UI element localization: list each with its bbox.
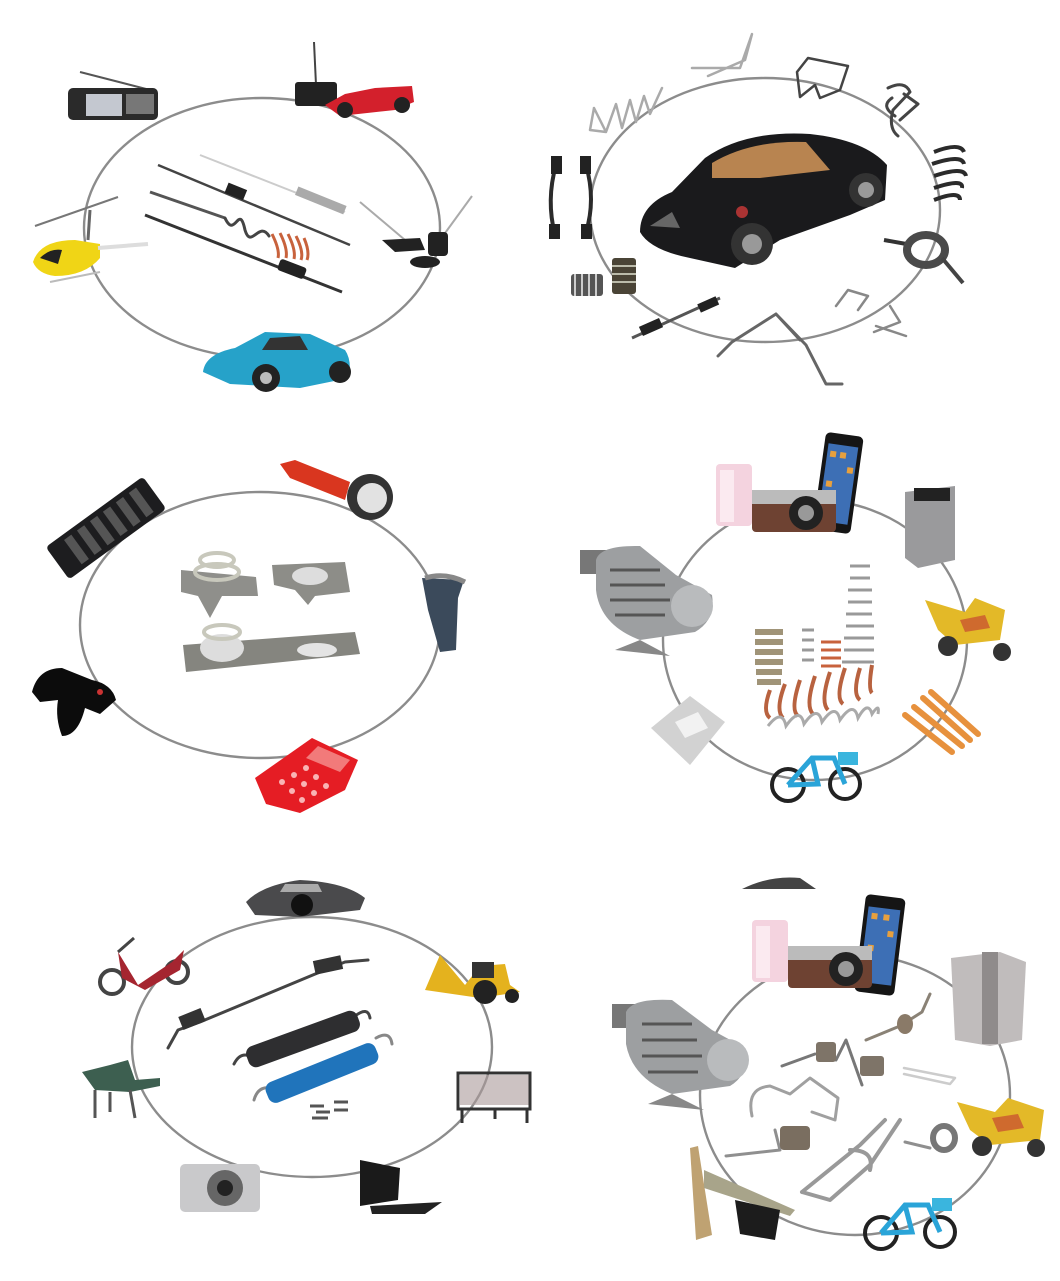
- icon: shock spring: [632, 296, 720, 338]
- spring group: wire springs: [145, 155, 350, 292]
- icon: flat wire spring: [590, 88, 662, 132]
- icon: metal hinge: [951, 952, 1026, 1046]
- icon: backhoe loader: [425, 955, 520, 1004]
- icon: power bank: [716, 464, 752, 526]
- icon: computer monitor: [360, 1160, 442, 1214]
- icon: car roof partial: [742, 877, 816, 889]
- panel: automotive springs: [549, 34, 966, 384]
- icon: red electric bike: [100, 938, 188, 994]
- icon: wire form: [797, 58, 848, 98]
- icon: red telephone: [255, 738, 358, 813]
- panel: compression springs: [580, 432, 1011, 801]
- icon: metal plate part: [651, 696, 725, 765]
- icon: smartphone: [854, 894, 906, 996]
- ring 6: [700, 955, 1010, 1235]
- icon: remote control race car: [295, 42, 414, 118]
- icon: game controller: [32, 668, 116, 736]
- icon: orange springs: [905, 692, 978, 752]
- icon: toy motorbike: [957, 1098, 1045, 1157]
- icon: trampoline: [458, 1073, 530, 1123]
- icon: blower motor: [612, 1000, 749, 1110]
- icon: red flashlight: [280, 460, 393, 520]
- ring 2: [590, 78, 940, 342]
- icon: camera: [752, 490, 836, 532]
- icon: wire clips: [836, 290, 906, 336]
- icon: blower motor: [580, 546, 713, 656]
- icon: electric shaver: [422, 576, 465, 652]
- icon: smartphone: [813, 432, 864, 534]
- spring group: compression springs: [755, 566, 878, 726]
- icon: valve springs: [571, 258, 636, 296]
- icon: torsion spring: [884, 235, 963, 283]
- icon: door handle spring: [549, 156, 592, 239]
- icon: radio: [68, 72, 158, 120]
- icon: helicopter: [33, 197, 148, 282]
- spring group: torsion springs: [726, 994, 955, 1200]
- icon: digital camera: [180, 1164, 260, 1212]
- icon: washing machine: [905, 486, 955, 568]
- ring 3: [80, 492, 440, 758]
- icon: blue child bicycle: [865, 1198, 955, 1249]
- icon: power bank: [752, 920, 788, 982]
- panel: extension springs: [82, 880, 530, 1214]
- panel: electronics and toy springs: [33, 42, 472, 392]
- icon: silver sports car: [246, 880, 365, 917]
- ring 1: [84, 98, 440, 358]
- icon: clip spring: [887, 85, 918, 136]
- panel: torsion springs: [612, 877, 1045, 1249]
- panel: battery contact springs: [32, 460, 465, 813]
- spring group: battery contacts: [181, 553, 360, 672]
- ring 4: [663, 500, 967, 780]
- icon: blue child bicycle: [772, 752, 860, 801]
- icon: blue convertible car: [203, 332, 351, 392]
- icon: toy motorbike: [925, 598, 1011, 661]
- icon: bent wire top: [692, 34, 752, 76]
- icon: long bent wire: [718, 314, 842, 384]
- icon: camera: [788, 946, 872, 988]
- icon: black car with tan interior: [640, 134, 887, 268]
- icon: wooden peg and binder clip: [690, 1146, 795, 1240]
- icon: TV remote control: [46, 477, 166, 579]
- ring 5: [132, 917, 492, 1177]
- icon: small springs and antennae: [360, 196, 472, 268]
- icon: black compression spring: [932, 147, 966, 200]
- icon: workshop machine: [82, 1060, 160, 1118]
- spring group: extension springs: [168, 955, 392, 1118]
